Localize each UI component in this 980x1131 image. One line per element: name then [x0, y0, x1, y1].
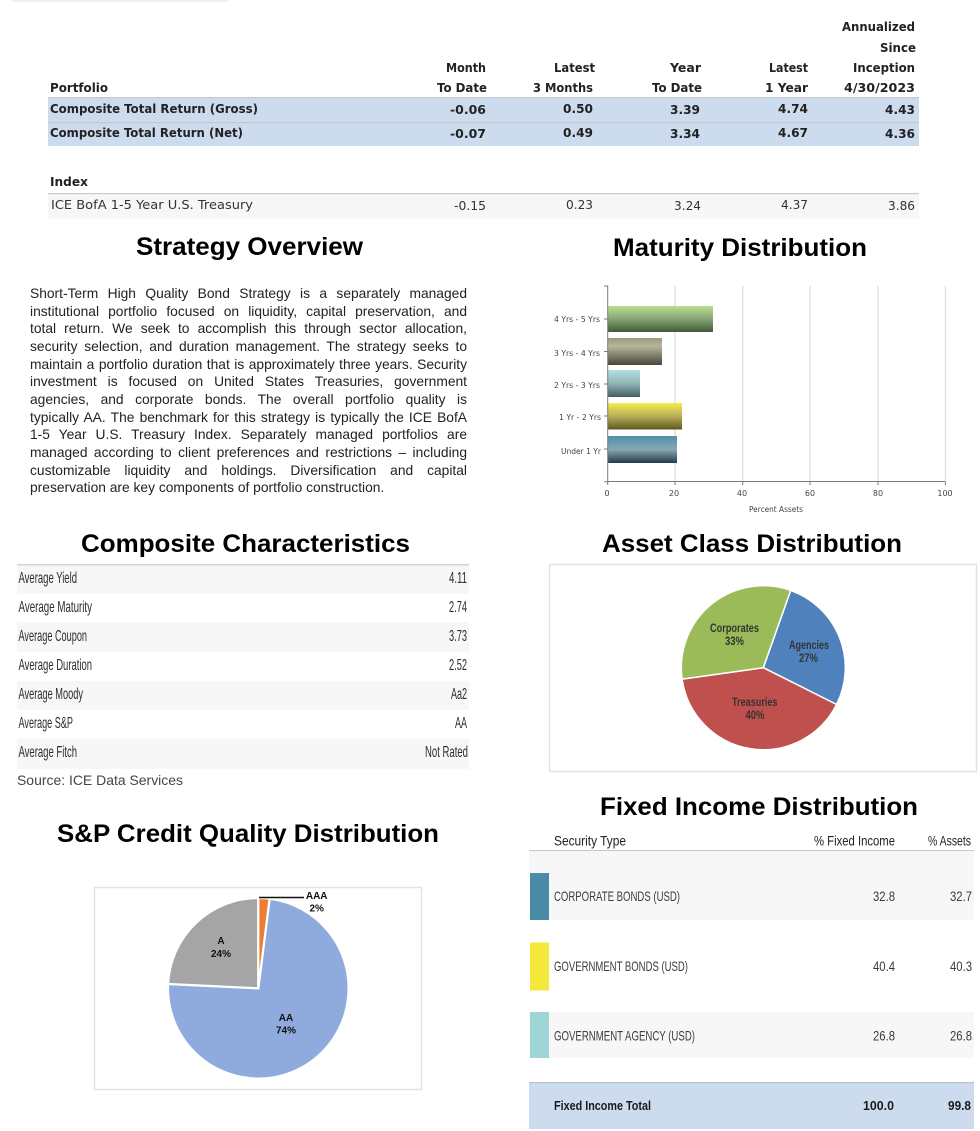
table column headers: Year [669, 61, 701, 75]
category labels: 1 Yr - 2 Yrs [559, 413, 601, 422]
row: corporate bonds [529, 851, 974, 920]
row: composite total return gross [48, 97, 919, 122]
row: composite total return gross: -0.06 [450, 103, 486, 117]
axis values: 80 [873, 489, 883, 498]
pie label: corporates [710, 623, 759, 648]
pie chart: asset class distribution [550, 564, 976, 772]
row: average moody: Aa2 [451, 686, 467, 703]
pie label: treasuries: Treasuries [732, 697, 778, 709]
row: ICE BofA index: -0.15 [454, 199, 486, 213]
index heading: Index [50, 175, 88, 189]
table column headers: Portfolio [50, 81, 108, 95]
table: composite characteristics [17, 564, 469, 769]
category labels: 3 Yrs - 4 Yrs [554, 349, 600, 358]
pie label: agencies: Agencies [789, 640, 829, 652]
source note: Source: ICE Data Services [17, 772, 183, 788]
heading: fixed income distribution: Fixed Income Distribution [600, 793, 918, 821]
row: government bonds: 40.3 [950, 958, 972, 974]
row: government bonds: GOVERNMENT BONDS (USD) [554, 958, 688, 974]
text block: strategy overview: managed according to client preferences and restrictions – including [30, 445, 467, 460]
axis title: Percent Assets [749, 505, 803, 514]
row: average maturity [18, 599, 467, 616]
pie label: AAA: AAA [306, 891, 328, 902]
pie label: corporates: 33% [725, 636, 744, 648]
row: government agency [529, 1012, 974, 1058]
pie label: AAA [306, 891, 328, 914]
table column headers [50, 20, 916, 95]
axis values [604, 489, 953, 498]
row: composite total return gross: Composite Total Return (Gross) [50, 102, 258, 116]
row: composite total return gross: 4.74 [778, 102, 808, 116]
table column headers: 3 Months [533, 81, 593, 95]
pie label: A [211, 936, 231, 960]
row: average maturity: 2.74 [449, 599, 467, 616]
row: ICE BofA index: 3.86 [888, 199, 915, 213]
table column headers: Month [446, 61, 486, 75]
row: average S&P: Average S&P [18, 715, 73, 732]
row: ICE BofA index: 0.23 [566, 198, 593, 212]
table: fixed income distribution [529, 832, 974, 1129]
category labels: Under 1 Yr [561, 447, 602, 456]
row: government bonds: 40.4 [873, 958, 895, 974]
row: average maturity: Average Maturity [18, 599, 92, 616]
row: average yield [18, 570, 467, 587]
row: corporate bonds: 32.8 [873, 888, 895, 904]
table column headers: Annualized [842, 20, 915, 34]
axis values: 20 [669, 489, 679, 498]
row: composite total return net: 4.67 [778, 126, 808, 140]
axis values: 100 [937, 489, 953, 498]
table header [529, 832, 974, 851]
row: fixed income total: 100.0 [863, 1098, 894, 1113]
row: fixed income total: 99.8 [948, 1098, 971, 1113]
row: average coupon [18, 628, 467, 645]
row: composite total return net: 3.34 [670, 127, 700, 141]
row: composite total return net [48, 122, 919, 146]
pie label: AAA: 2% [309, 904, 324, 914]
leader line [259, 896, 304, 898]
axis values: 0 [604, 489, 610, 498]
row: average duration: Average Duration [18, 657, 92, 674]
table column headers: Inception [853, 61, 915, 75]
row: average coupon: 3.73 [449, 628, 467, 645]
pie label: agencies [789, 640, 829, 665]
row: average coupon: Average Coupon [18, 628, 87, 645]
heading: asset class distribution: Asset Class Distribution [602, 530, 902, 558]
row: composite total return net: Composite Total Return (Net) [50, 126, 243, 140]
row: average S&P: AA [455, 715, 467, 732]
pie label: treasuries: 40% [746, 710, 764, 722]
row: average yield: Average Yield [18, 570, 77, 587]
row: government bonds [530, 942, 972, 990]
row: government agency: 26.8 [873, 1028, 895, 1044]
pie label: AA: 74% [276, 1026, 296, 1036]
row: government agency: 26.8 [950, 1028, 972, 1044]
text block: strategy overview: customizable liquidity and holdings. Diversification and capital [30, 463, 467, 478]
axis values: 40 [737, 489, 747, 498]
row: average fitch: Not Rated [425, 744, 468, 761]
text block: strategy overview: preservation are key components of portfolio construction. [30, 480, 384, 495]
row: composite total return gross: 4.43 [885, 103, 915, 117]
text block: strategy overview: 1-5 Year U.S. Treasury Index. Separately managed portfolios are [30, 427, 467, 442]
text block: strategy overview: total return. We seek to accomplish this through sector allocation, [30, 321, 467, 336]
table column headers: To Date [437, 81, 487, 95]
row: average duration: 2.52 [449, 657, 467, 674]
category labels [554, 315, 602, 456]
row: ICE BofA index: 3.24 [674, 199, 701, 213]
table column headers: Since [880, 41, 916, 55]
table header: % Fixed Income [814, 832, 895, 848]
row: composite total return gross: 3.39 [670, 103, 700, 117]
pie label: corporates: Corporates [710, 623, 759, 635]
row: composite total return net: 0.49 [563, 126, 593, 140]
bar chart: maturity distribution [554, 286, 953, 514]
pie label: A: A [217, 936, 225, 947]
table column headers: 4/30/2023 [844, 81, 915, 95]
pie label: AA [276, 1013, 296, 1036]
text block: strategy overview: investment is focused on United States Treasuries, government [30, 374, 467, 389]
row: average yield: 4.11 [449, 570, 467, 587]
table column headers: 1 Year [765, 81, 808, 95]
row: fixed income total [529, 1082, 974, 1129]
bars [608, 306, 713, 463]
pie label: A: 24% [211, 949, 231, 960]
row: average fitch: Average Fitch [18, 744, 77, 761]
text block: strategy overview: security selection, and duration management. The strategy seeks to [30, 339, 467, 354]
heading: maturity distribution: Maturity Distribution [613, 234, 867, 262]
heading: strategy overview: Strategy Overview [136, 233, 364, 261]
row: composite total return net: 4.36 [885, 127, 915, 141]
pie label: treasuries [732, 697, 778, 722]
text block: strategy overview: Short-Term High Quality Bond Strategy is a separately managed [30, 286, 467, 301]
table column headers: Latest [769, 61, 808, 75]
row: average duration [18, 657, 467, 674]
heading: composite characteristics: Composite Characteristics [81, 530, 410, 558]
pie chart: S&P credit quality [94, 888, 422, 1090]
row: average fitch [18, 744, 468, 761]
text block: strategy overview: institutional portfolio focused on liquidity, capital preservation, and [30, 304, 467, 319]
category labels: 4 Yrs - 5 Yrs [554, 315, 600, 324]
category labels: 2 Yrs - 3 Yrs [554, 381, 600, 390]
pie label: agencies: 27% [799, 653, 818, 665]
text block: strategy overview: agencies, and corporate bonds. The overall portfolio quality is [30, 392, 467, 407]
row: ICE BofA index [48, 193, 919, 219]
text block: strategy overview: maintain a portfolio duration that is approximately three years. Security [30, 357, 467, 372]
table column headers: To Date [652, 81, 702, 95]
text block: strategy overview: typically AA. The benchmark for this strategy is typically the ICE BofA [30, 410, 467, 425]
row: government agency: GOVERNMENT AGENCY (USD) [554, 1028, 695, 1044]
text block: strategy overview [30, 286, 467, 495]
row: corporate bonds: 32.7 [950, 888, 972, 904]
performance table [48, 20, 919, 219]
row: composite total return net: -0.07 [450, 127, 486, 141]
row: composite total return gross: 0.50 [563, 102, 593, 116]
row: ICE BofA index: ICE BofA 1-5 Year U.S. Treasury [51, 198, 253, 212]
row: corporate bonds: CORPORATE BONDS (USD) [554, 888, 680, 904]
pie label: AA: AA [279, 1013, 293, 1024]
row: average moody [18, 686, 467, 703]
row: fixed income total: Fixed Income Total [554, 1098, 651, 1113]
heading: S&P credit quality distribution: S&P Credit Quality Distribution [57, 820, 439, 848]
row: average moody: Average Moody [18, 686, 83, 703]
table column headers: Latest [554, 61, 595, 75]
row: ICE BofA index: 4.37 [781, 198, 808, 212]
axis values: 60 [805, 489, 815, 498]
row: average S&P [18, 715, 467, 732]
table header: Security Type [554, 832, 626, 848]
